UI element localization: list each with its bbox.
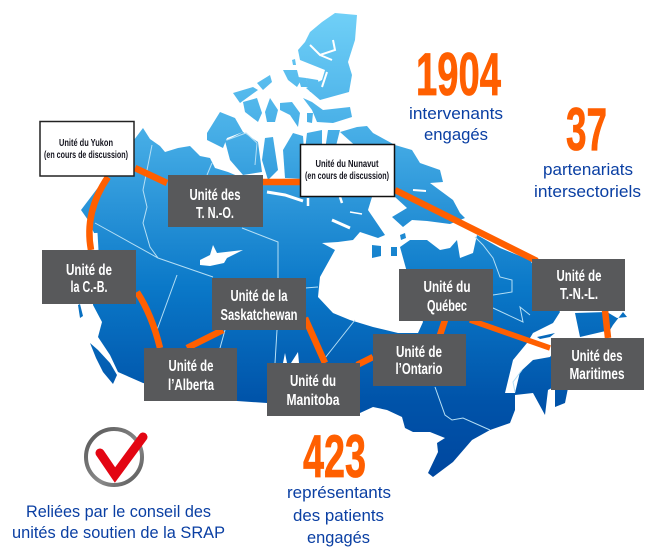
box: Unité de l'Ontario: Unité de — [396, 344, 442, 361]
box: Unité du Nunavut — [300, 144, 394, 196]
box: Unité du Nunavut: Unité du Nunavut — [316, 158, 379, 170]
box: Unité de l'Alberta — [144, 348, 237, 401]
caption: conseil des unités — [12, 503, 225, 542]
box: Unité de la Saskatchewan — [212, 278, 306, 330]
box: Unité de la C.-B.: la C.-B. — [70, 279, 108, 296]
box: Unité du Manitoba: Unité du — [290, 373, 336, 390]
stat: 37 partenariats intersectoriels: partenariats — [543, 161, 633, 179]
box: Unité de T.-N.-L. — [532, 259, 625, 311]
box: Unité des T. N.-O.: Unité des — [190, 187, 240, 204]
stat: 423 représentants des patients engagés: représentants — [287, 484, 391, 502]
stat: 37 partenariats intersectoriels: 37 — [566, 96, 607, 163]
inlets and lakes — [95, 40, 426, 250]
box: Unité de l'Ontario: l’Ontario — [396, 361, 442, 378]
box: Unité du Québec — [399, 269, 493, 321]
stat: 423 représentants des patients engagés — [287, 423, 391, 547]
box: Unité de la C.-B.: Unité de — [66, 262, 112, 279]
stat: 37 partenariats intersectoriels — [534, 96, 641, 201]
box: Unité du Québec: Unité du — [424, 279, 470, 296]
provincial borders — [95, 133, 530, 430]
Great Slave Lake — [200, 245, 243, 266]
caption: conseil des unités: Reliées par le conseil des — [26, 503, 211, 521]
stat: 1904 intervenants engagés: intervenants — [409, 105, 503, 123]
box: Unité des Maritimes: Maritimes — [570, 366, 624, 383]
box: Unité du Yukon: Unité du Yukon — [59, 137, 113, 149]
stat: 423 représentants des patients engagés: engagés — [307, 529, 370, 547]
stat: 423 représentants des patients engagés: des patients — [293, 507, 384, 525]
box: Unité de la C.-B. — [42, 250, 136, 304]
Baffin Island — [340, 126, 465, 227]
box: Unité de la Saskatchewan: Unité de la — [230, 288, 288, 305]
stat: 1904 intervenants engagés: engagés — [424, 126, 488, 144]
box: Unité du Yukon — [40, 122, 134, 176]
stat: 37 partenariats intersectoriels: intersectoriels — [534, 183, 641, 201]
box: Unité de l'Alberta: Unité de — [168, 358, 214, 375]
box: Unité de l'Alberta: l’Alberta — [168, 377, 214, 394]
icon: red check mark in grey ring — [86, 429, 143, 485]
stat: 1904 intervenants engagés: 1904 — [416, 41, 501, 108]
box: Unité de la Saskatchewan: Saskatchewan — [220, 307, 298, 324]
box: Unité du Manitoba: Manitoba — [286, 392, 340, 409]
Lake Winnipeg — [283, 352, 299, 363]
Devon Island — [303, 98, 352, 123]
box: Unité du Nunavut: (en cours de discussion) — [305, 170, 389, 182]
box: Unité de T.-N.-L.: T.-N.-L. — [560, 286, 598, 303]
box: Unité des Maritimes — [551, 338, 644, 390]
stat: 423 représentants des patients engagés: 423 — [303, 423, 366, 490]
Ellesmere Island — [298, 13, 357, 100]
arctic islands — [78, 59, 627, 407]
box: Unité de T.-N.-L.: Unité de — [556, 268, 602, 285]
box: Unité du Manitoba — [267, 363, 360, 416]
map of Canada — [78, 13, 627, 477]
caption: conseil des unités: unités de soutien de la SRAP — [12, 524, 225, 542]
box: Unité des T. N.-O. — [168, 175, 263, 227]
box: Unité de l'Ontario — [373, 334, 466, 386]
box: Unité des Maritimes: Unité des — [572, 348, 622, 365]
box: Unité des T. N.-O.: T. N.-O. — [196, 205, 234, 222]
box: Unité du Yukon: (en cours de discussion) — [44, 149, 128, 161]
stat: 1904 intervenants engagés — [409, 41, 503, 144]
box: Unité du Québec: Québec — [427, 298, 467, 315]
connector lines — [89, 168, 608, 365]
mainland — [81, 128, 560, 477]
